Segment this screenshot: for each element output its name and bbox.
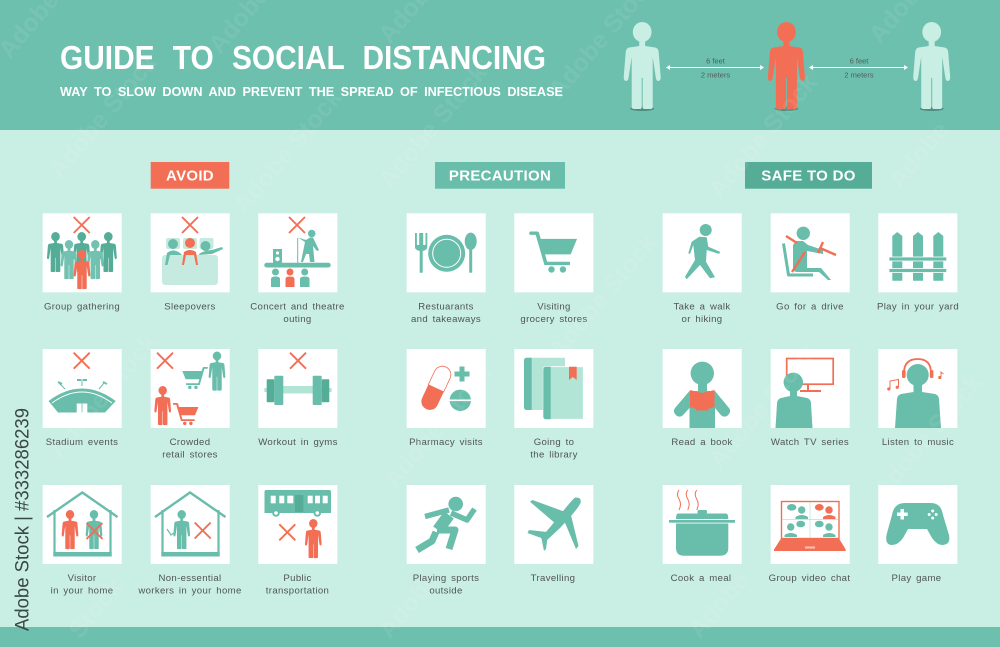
watermark: Adobe Stock	[228, 84, 348, 219]
heading: safe to do: SAFE TO DO	[761, 168, 856, 184]
stock credit: Adobe Stock | #333286239	[12, 408, 34, 631]
tile: take a walk or hiking	[663, 213, 742, 325]
label: transportation	[266, 585, 329, 596]
subtitle: WAY TO SLOW DOWN AND PREVENT THE SPREAD OF INFECTIOUS DISEASE	[60, 84, 563, 99]
tile: non-essential workers	[137, 485, 242, 596]
icon: walker	[685, 224, 720, 279]
label: Play in your yard	[877, 302, 959, 312]
panel: avoid	[43, 213, 345, 596]
watermark: Adobe Stock	[703, 339, 823, 474]
icon: person and television	[776, 358, 833, 428]
label: Take a walk	[673, 302, 731, 312]
icon: laptop video call	[774, 502, 846, 551]
icon: person with headphones	[887, 359, 944, 428]
icon: steaming pot	[669, 490, 735, 556]
watermark: Adobe Stock	[43, 329, 163, 464]
label: Crowded	[170, 437, 210, 448]
watermark: Stock	[63, 574, 128, 644]
label: Restuarants	[418, 302, 474, 312]
label: Group gathering	[44, 302, 120, 312]
tile: travelling	[514, 485, 593, 584]
icon: shoppers and carts	[154, 352, 225, 425]
watermark: Adobe Stock	[703, 69, 823, 204]
tile: group video chat	[769, 485, 850, 584]
tile: crowded retail stores	[151, 349, 230, 460]
label: outside	[429, 585, 463, 596]
heading: precaution	[435, 162, 565, 189]
label: Travelling	[531, 573, 575, 584]
label: Read a book	[671, 437, 733, 448]
label: Stadium events	[46, 437, 118, 448]
tile: visitor in your home	[43, 485, 122, 596]
icon: game controller	[886, 503, 949, 545]
header band	[0, 0, 1000, 130]
tile: going to the library	[514, 349, 593, 460]
watermark: Adobe	[373, 566, 445, 644]
icon: dumbbell	[264, 353, 332, 405]
title: GUIDE TO SOCIAL DISTANCING	[60, 39, 546, 76]
label: Watch TV series	[771, 437, 849, 448]
label: retail stores	[162, 449, 218, 460]
label: Going to	[534, 437, 574, 448]
icon: stadium	[48, 353, 116, 412]
icon: house with worker	[155, 492, 226, 556]
label: Workout in gyms	[258, 437, 338, 448]
distancing diagram	[624, 22, 950, 111]
icon: stage with singer	[264, 217, 331, 287]
label: the library	[530, 449, 578, 460]
label: Go for a drive	[776, 302, 844, 312]
label: Visitor	[68, 573, 97, 584]
distancing diagram: 6 feet	[706, 56, 726, 66]
label: Cook a meal	[671, 573, 731, 584]
icon: airplane	[528, 497, 581, 551]
icon: books	[524, 358, 583, 419]
heading: precaution: PRECAUTION	[449, 168, 551, 184]
label: Concert and theatre	[250, 302, 345, 312]
label: Sleepovers	[164, 302, 216, 312]
tile: read a book	[663, 349, 742, 448]
tile: cook a meal	[663, 485, 742, 584]
icon: group of people	[47, 217, 117, 289]
distancing diagram: 2 meters	[844, 70, 874, 80]
tile: public transportation	[258, 485, 337, 596]
tile: playing sports outside	[407, 485, 486, 596]
label: Play game	[892, 573, 942, 584]
icon: house with visitor	[47, 492, 118, 556]
label: workers in your home	[137, 585, 242, 596]
distancing diagram: 6 feet	[850, 56, 869, 66]
icon: person reading	[674, 362, 730, 428]
watermark: Adobe Stock	[543, 229, 663, 364]
label: Public	[283, 573, 312, 584]
heading: avoid	[151, 162, 229, 189]
label: or hiking	[682, 314, 722, 325]
icon: runner	[417, 497, 474, 550]
panel: precaution	[407, 213, 593, 596]
tile: pharmacy visits	[407, 349, 486, 448]
icon: shopping cart	[529, 232, 577, 273]
icon: friends in bed	[162, 217, 223, 285]
heading: safe to do	[745, 162, 872, 189]
distancing diagram: 2 meters	[701, 70, 730, 80]
icon: driver with seat belt	[784, 227, 836, 280]
label: Playing sports	[413, 573, 479, 584]
tile: play game	[878, 485, 957, 584]
label: Group video chat	[769, 573, 850, 584]
watermark: Adobe Stock	[373, 59, 493, 194]
icon: fence	[889, 232, 947, 281]
watermark: Adobe Stock	[868, 369, 988, 504]
watermark: Adobe	[683, 566, 755, 644]
label: grocery stores	[520, 314, 588, 325]
tile: group gathering	[43, 213, 122, 312]
label: outing	[283, 314, 312, 325]
label: Visiting	[537, 302, 571, 312]
tile: go for a drive	[771, 213, 850, 312]
tile: workout in gyms	[258, 349, 338, 448]
icon: plate and cutlery	[415, 233, 477, 273]
tile: sleepovers	[151, 213, 230, 312]
panel: safe to do	[663, 213, 959, 584]
watermark: Adobe Stock	[43, 49, 163, 184]
label: in your home	[51, 585, 113, 596]
label: and takeaways	[411, 314, 481, 325]
tile: restaurants and takeaways	[407, 213, 486, 325]
tile: visiting grocery stores	[514, 213, 593, 325]
icon: pills	[419, 363, 471, 413]
tile: watch tv series	[771, 349, 850, 448]
icon: bus and person	[264, 490, 331, 558]
label: Non-essential	[158, 573, 222, 584]
footer band	[0, 627, 1000, 647]
tile: concert and theatre outing	[250, 213, 345, 325]
watermark: Adobe Stock	[378, 359, 498, 494]
watermark: Adobe	[883, 116, 955, 194]
tile: stadium events	[43, 349, 122, 448]
label: Listen to music	[882, 437, 954, 448]
label: Pharmacy visits	[409, 437, 483, 448]
tile: listen to music	[878, 349, 957, 448]
tile: play in your yard	[877, 213, 959, 312]
heading: avoid: AVOID	[166, 168, 214, 184]
